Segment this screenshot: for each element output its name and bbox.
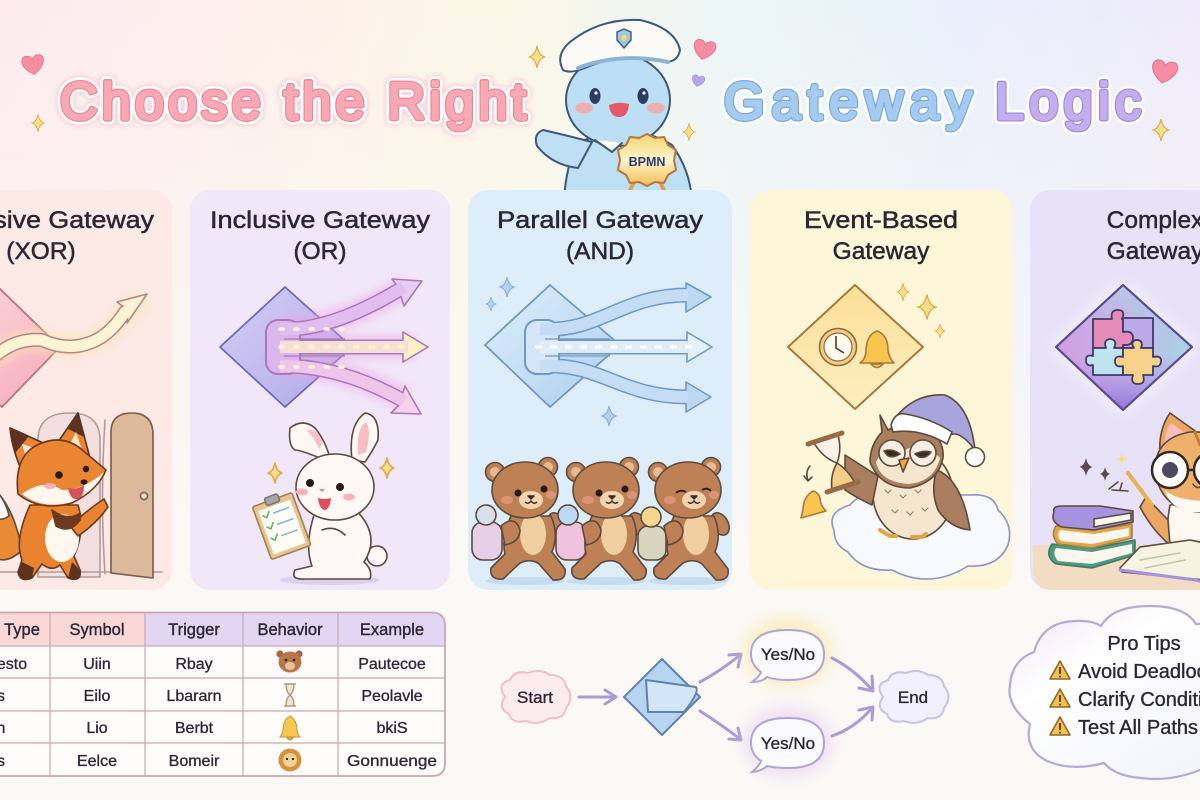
- title part: Choose the Right: Choose the Right: [60, 73, 527, 131]
- icon: lion: [278, 748, 302, 772]
- title part: Logic: Logic: [995, 73, 1141, 131]
- heading: Event-Based Gateway: [804, 207, 958, 265]
- owl wing: [934, 470, 970, 530]
- table row 4: [0, 748, 437, 772]
- title part: Logic: Logic: [995, 73, 1141, 131]
- node: top Yes/No bubble: Yes/No: [761, 645, 815, 664]
- hourglass: [808, 433, 858, 492]
- clipboard: [251, 489, 311, 560]
- table header labels: Behavior: [257, 621, 323, 639]
- table header labels: Trigger: [168, 621, 220, 639]
- arrow: single glowing path: [0, 294, 147, 356]
- table row 1: Uiin: [83, 656, 111, 673]
- table header labels: Type: [4, 621, 40, 639]
- heading: Inclusive Gateway: Inclusive Gateway: [210, 207, 431, 234]
- table row 2: Peolavle: [361, 688, 423, 705]
- cat glasses: [1152, 452, 1188, 488]
- title part: Gateway: Gateway: [724, 73, 972, 131]
- table: [1033, 545, 1200, 590]
- panel: Inclusive Gateway: [190, 190, 450, 590]
- icon: clock: [820, 328, 856, 366]
- icon: bell: [280, 716, 300, 740]
- arrow: bottom decision to End: [832, 707, 873, 736]
- character: fox at door: [0, 413, 162, 580]
- table row 1: Rbay: [175, 656, 213, 673]
- tip 3: Test All Paths: [1078, 717, 1198, 739]
- node: Start: [501, 671, 570, 723]
- title: [60, 73, 1141, 131]
- owl head: [870, 415, 943, 488]
- heading: Complex Gateway: [1107, 207, 1200, 265]
- tips heading: Pro Tips: [1107, 633, 1181, 655]
- cat body: [1167, 500, 1200, 570]
- table row 4: Gonnuenge: [347, 753, 437, 770]
- table row 2: Lbararn: [166, 688, 222, 705]
- node: bottom Yes/No bubble: Yes/No: [761, 734, 815, 753]
- bear 3: [638, 458, 733, 585]
- table row 2: Eilo: [84, 688, 110, 705]
- mascot body: [564, 132, 692, 200]
- sparkles near cat: [1080, 458, 1092, 476]
- node: bottom Yes/No bubble: [744, 708, 832, 776]
- table row 1: Pautecoe: [358, 656, 426, 673]
- icon: hourglass: [284, 684, 296, 706]
- arrow: gateway to bottom decision: [700, 711, 741, 740]
- heading: Parallel Gateway: [497, 207, 704, 265]
- title part: Logic: Logic: [995, 73, 1141, 131]
- cloud: [832, 495, 1010, 579]
- heading: Inclusive Gateway: [210, 207, 431, 265]
- title part: Gateway: Gateway: [724, 73, 972, 131]
- owl body: [873, 449, 953, 539]
- mascot: blue BPMN officer: [536, 20, 692, 200]
- arrow: top decision to End: [832, 658, 873, 691]
- table row 1: [0, 650, 426, 673]
- diamond: parallel: [485, 285, 620, 407]
- node: top Yes/No bubble: [744, 618, 832, 686]
- door: [111, 413, 153, 578]
- small bell: [801, 491, 826, 518]
- icon: puzzle pieces: [1086, 310, 1161, 384]
- panel: Event-Based Gateway: [750, 190, 1012, 590]
- icon: bell: [860, 331, 894, 368]
- table header labels: [4, 621, 424, 639]
- table row 3: Berbt: [175, 720, 214, 737]
- diamond: complex: [1055, 284, 1193, 411]
- arrows: three glowing branches: [266, 279, 428, 414]
- book stack: [1049, 506, 1135, 568]
- panel: Complex Gateway: [1030, 190, 1200, 590]
- owl feet: [880, 530, 926, 537]
- table row 2: [0, 684, 423, 706]
- title part: Choose the Right: Choose the Right: [60, 73, 527, 131]
- table row 3: Lio: [86, 720, 108, 737]
- mascot head: [566, 54, 670, 146]
- diamond: inclusive: [220, 287, 352, 407]
- mascot medal: [618, 134, 676, 190]
- sparkles: [897, 284, 945, 338]
- heading: Parallel Gateway: (AND): [566, 238, 634, 265]
- sparkles: [486, 277, 616, 426]
- bear 2: [556, 458, 651, 585]
- arrow: gateway to top decision: [700, 654, 741, 682]
- table header labels: Symbol: [69, 621, 125, 639]
- icon: bear: [276, 650, 303, 672]
- open book: [1120, 540, 1200, 588]
- character: bunny with clipboard: [251, 413, 394, 585]
- bear 1: [472, 458, 570, 585]
- mascot medal: BPMN: [629, 155, 665, 169]
- character: sleepy owl on cloud: [801, 395, 1010, 579]
- bunny head: [296, 454, 374, 520]
- fox tail: [0, 490, 22, 560]
- title part: Gateway: Gateway: [724, 73, 972, 131]
- mascot cap: [560, 20, 680, 72]
- table header background: [0, 613, 445, 646]
- heading: Exclusive Gateway: (XOR): [6, 238, 76, 265]
- table row 4: Eelce: [77, 753, 117, 770]
- characters: three bears with backpacks: [472, 458, 733, 585]
- node: gateway diamond: [624, 659, 700, 735]
- callout: Pro Tips cloud: [1009, 606, 1200, 779]
- node: Start: Start: [517, 688, 553, 707]
- diamond: exclusive: [0, 287, 60, 407]
- character: cat with glasses: [1033, 413, 1200, 590]
- heading: Inclusive Gateway: (OR): [293, 238, 347, 265]
- node: End: [879, 671, 948, 723]
- heading: Event-Based Gateway: Event-Based: [804, 207, 958, 234]
- heading: Parallel Gateway: Parallel Gateway: [497, 207, 704, 234]
- heading: Event-Based Gateway: Gateway: [833, 238, 930, 265]
- bunny tail and body: [367, 546, 387, 566]
- fox body: [18, 505, 81, 580]
- mascot arm: [536, 130, 592, 168]
- mascot face: [575, 88, 665, 117]
- decorative hearts and sparkles: [21, 38, 1179, 141]
- cat ears: [1160, 413, 1198, 455]
- title part: Choose the Right: Choose the Right: [60, 73, 527, 131]
- node: End: End: [898, 688, 928, 707]
- panel: Parallel Gateway: [468, 190, 733, 590]
- table row 4: Bomeir: [169, 753, 220, 770]
- table header labels: Example: [360, 621, 424, 639]
- fox ears: [10, 428, 50, 476]
- comparison table: [0, 612, 445, 776]
- fox arms: [70, 499, 108, 536]
- small down arrow: [804, 466, 812, 481]
- panel: Exclusive Gateway: [0, 190, 172, 590]
- arrow: Start to gateway: [579, 690, 616, 704]
- flow diagram: [501, 618, 948, 776]
- bunny ears: [290, 423, 330, 458]
- night cap: [895, 395, 975, 450]
- heading: Exclusive Gateway: [0, 207, 155, 265]
- cat head: [1155, 432, 1200, 512]
- diamond: event-based: [788, 285, 923, 409]
- table body and grid: [0, 612, 445, 776]
- owl arm: [845, 455, 878, 505]
- title part: Choose the Right: Choose the Right: [60, 73, 527, 131]
- table row 3: bkiS: [376, 720, 408, 737]
- table row 3: [0, 716, 408, 740]
- cat arm and pencil: [1140, 497, 1170, 545]
- arrows: three parallel branches: [525, 283, 712, 412]
- fox head: [17, 440, 106, 506]
